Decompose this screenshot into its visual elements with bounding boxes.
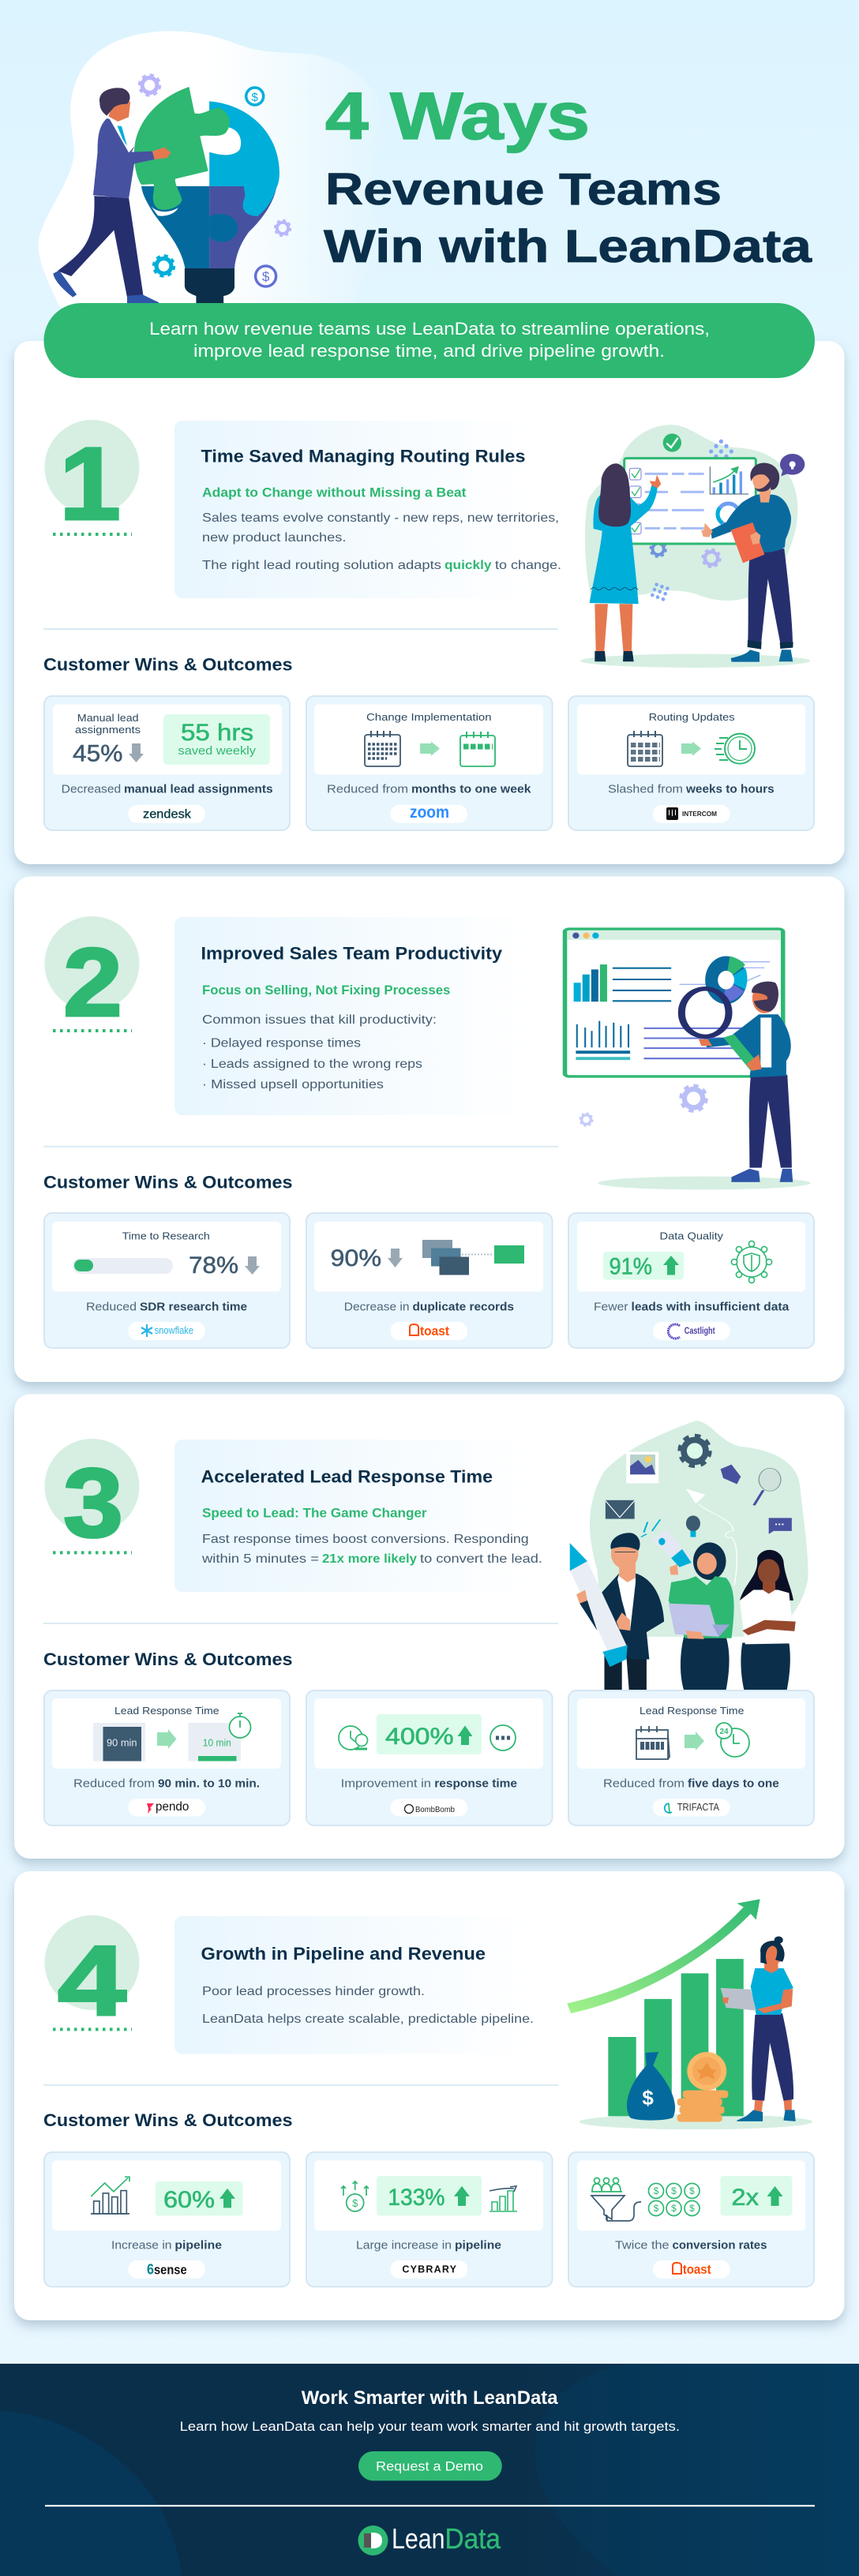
number badge 1 bbox=[44, 420, 139, 541]
card: five days to one bbox=[568, 1690, 814, 1825]
icon: arrow bbox=[420, 742, 440, 756]
logo: zoom bbox=[390, 803, 467, 823]
icon: 90 minute block bbox=[93, 1723, 145, 1762]
card: time to research: Time to Research bbox=[122, 1230, 210, 1242]
icon: purple dollar coin: $ bbox=[262, 269, 270, 284]
card: large pipeline increase: Large increase in bbox=[356, 2239, 452, 2252]
logo: pendo: pendo bbox=[156, 1800, 189, 1814]
stat: 55 hours saved: 55 hrs bbox=[181, 720, 253, 746]
title: Win with LeanData bbox=[324, 221, 812, 272]
card: duplicate records: duplicate records bbox=[412, 1301, 514, 1314]
stat: 60 percent bbox=[156, 2181, 243, 2216]
title bbox=[324, 79, 812, 272]
text panel: quickly bbox=[445, 559, 492, 572]
icon: calendar bbox=[636, 1726, 670, 1759]
icon: small gear bbox=[580, 1114, 592, 1125]
card: time to research: SDR research time bbox=[140, 1301, 247, 1314]
icon: funnel with people and coins: $ bbox=[671, 2185, 677, 2196]
icon: 90 minute block: 90 min bbox=[107, 1736, 137, 1748]
icon: cyan dollar coin: $ bbox=[252, 91, 259, 104]
logo: zendesk: zendesk bbox=[143, 807, 192, 821]
card: conversion rates bbox=[568, 2152, 814, 2287]
text panel: The right lead routing solution adapts bbox=[202, 559, 441, 572]
icon: clock with coin bbox=[339, 1726, 368, 1750]
icon: cyan gear bbox=[154, 256, 174, 276]
icon: 10 minute block: 10 min bbox=[203, 1736, 231, 1748]
number badge 3: 3 bbox=[63, 1449, 123, 1558]
panel 4: pipeline and revenue growth bbox=[14, 1871, 845, 2320]
intro banner: improve lead response time, and drive pipeline growth. bbox=[193, 341, 665, 361]
panel 3: lead response time bbox=[14, 1394, 845, 1859]
icon: gray calendar bbox=[365, 731, 400, 766]
card: pipeline increase: pipeline bbox=[174, 2239, 222, 2252]
icon: small purple gear bbox=[275, 220, 291, 236]
logo: zendesk bbox=[128, 805, 205, 823]
button: request a demo bbox=[358, 2451, 502, 2481]
card: duplicate records: Decrease in bbox=[344, 1301, 409, 1314]
icon: stopwatch bbox=[229, 1713, 251, 1738]
number badge 4: 4 bbox=[58, 1925, 126, 2036]
card: routing updates: Slashed from bbox=[608, 784, 683, 796]
card: 90 to 10 minutes bbox=[44, 1690, 290, 1825]
panel 1: time saved bbox=[14, 341, 845, 864]
icon: purple dollar coin bbox=[256, 266, 276, 286]
icon: dark gear bbox=[680, 1436, 710, 1466]
hero illustration: person fitting a puzzle piece into a light bulb bbox=[39, 31, 383, 308]
icon: 24 hour clock bbox=[716, 1723, 749, 1757]
icon: coin with up arrows: $ bbox=[352, 2197, 358, 2209]
card: large pipeline increase: pipeline bbox=[455, 2239, 501, 2252]
logo: LeanData: Data bbox=[445, 2522, 501, 2555]
footer bbox=[0, 2364, 859, 2576]
card: duplicate records: 90% bbox=[330, 1245, 381, 1271]
logo: cybrary bbox=[390, 2260, 467, 2278]
logo: toast bbox=[390, 1322, 467, 1340]
card: large pipeline increase bbox=[306, 2152, 553, 2287]
icon: purple gear bbox=[140, 75, 159, 95]
text panel: Poor lead processes hinder growth. bbox=[202, 1985, 425, 1998]
card: pipeline increase: Increase in bbox=[111, 2239, 172, 2252]
logo: zoom: zoom bbox=[410, 803, 449, 822]
logo: 6sense: sense bbox=[154, 2262, 187, 2277]
number badge 2 bbox=[44, 916, 139, 1037]
icon: green calendar bbox=[460, 732, 495, 766]
icon: funnel with people and coins: $ bbox=[654, 2203, 659, 2214]
number badge 2: 2 bbox=[63, 929, 122, 1037]
icon: bar chart with trend arrow bbox=[91, 2177, 129, 2214]
number badge 3 bbox=[44, 1439, 139, 1558]
logo: intercom bbox=[653, 805, 730, 823]
icon: funnel with people and coins bbox=[591, 2178, 700, 2221]
text panel bbox=[174, 1440, 593, 1592]
card: conversion rates: Twice the bbox=[615, 2239, 670, 2252]
title: Revenue Teams bbox=[325, 164, 722, 215]
icon: calendar bbox=[628, 731, 662, 766]
card: time to research: Reduced bbox=[86, 1301, 137, 1314]
logo: 6sense: 6 bbox=[147, 2261, 154, 2277]
text panel: within 5 minutes = bbox=[201, 1552, 319, 1566]
card: conversion rates: conversion rates bbox=[673, 2239, 767, 2252]
logo: castlight: Castlight bbox=[685, 1327, 715, 1336]
text panel: Accelerated Lead Response Time bbox=[201, 1467, 493, 1487]
card: five days to one: Reduced from bbox=[603, 1777, 685, 1790]
text panel: Time Saved Managing Routing Rules bbox=[201, 447, 526, 466]
text panel bbox=[174, 1916, 593, 2054]
card: 90 to 10 minutes: Reduced from bbox=[73, 1777, 155, 1790]
card: five days to one: five days to one bbox=[688, 1777, 779, 1790]
icon: funnel with people and coins: $ bbox=[689, 2203, 695, 2214]
card: 90 to 10 minutes: Lead Response Time bbox=[114, 1705, 219, 1717]
illustration: growth chart with woman and money: $ bbox=[642, 2086, 654, 2110]
illustration: marketing team with megaphone bbox=[570, 1421, 808, 1690]
stat: 133 percent bbox=[377, 2176, 482, 2216]
text panel: LeanData helps create scalable, predictable pipeline. bbox=[202, 2012, 534, 2026]
card: routing updates: Routing Updates bbox=[649, 711, 735, 723]
text panel: Common issues that kill productivity: bbox=[202, 1013, 437, 1027]
card: change implementation: Reduced from bbox=[327, 784, 408, 796]
card: manual lead assignments: Decreased bbox=[62, 784, 121, 796]
card: manual lead assignments: 45% bbox=[73, 740, 122, 766]
card: pipeline increase bbox=[44, 2152, 290, 2287]
card: data quality: Data Quality bbox=[660, 1230, 724, 1242]
logo: intercom: INTERCOM bbox=[682, 810, 717, 818]
text panel: 21x more likely bbox=[322, 1552, 417, 1566]
card: manual lead assignments: assignments bbox=[75, 724, 141, 736]
text panel: Focus on Selling, Not Fixing Processes bbox=[202, 983, 450, 998]
icon: large gear bbox=[681, 1086, 706, 1110]
card: data quality: leads with insufficient data bbox=[632, 1301, 790, 1314]
logo: snowflake bbox=[128, 1322, 205, 1340]
logo: toast bbox=[653, 2260, 730, 2278]
stat: 2x bbox=[720, 2176, 793, 2216]
card: change implementation bbox=[306, 696, 553, 830]
card: 400 percent: Improvement in bbox=[341, 1777, 431, 1790]
number badge 4 bbox=[44, 1915, 139, 2036]
text panel: · Delayed response times bbox=[202, 1036, 361, 1050]
icon: down arrow bbox=[388, 1249, 403, 1267]
icon: chat bubble bbox=[490, 1725, 516, 1750]
illustration: analyst with dashboard and magnifier bbox=[565, 929, 810, 1189]
heading: customer wins: Customer Wins & Outcomes bbox=[43, 1649, 292, 1669]
heading: customer wins: Customer Wins & Outcomes bbox=[43, 1173, 292, 1193]
card: 400 percent: response time bbox=[434, 1777, 517, 1790]
icon: cyan dollar coin bbox=[246, 88, 264, 105]
text panel: Adapt to Change without Missing a Beat bbox=[202, 486, 467, 500]
card: manual lead assignments: manual lead assignments bbox=[124, 784, 273, 796]
text panel: Sales teams evolve constantly - new reps, new territories, bbox=[202, 511, 559, 525]
text panel: new product launches. bbox=[202, 531, 346, 545]
logo: LeanData: Lean bbox=[392, 2522, 445, 2555]
card: 400 percent bbox=[306, 1690, 553, 1825]
card: manual lead assignments: Manual lead bbox=[77, 712, 139, 724]
logo: pendo bbox=[128, 1799, 205, 1817]
icon: coin with up arrows bbox=[341, 2181, 369, 2211]
card: data quality: Fewer bbox=[594, 1301, 628, 1314]
card: 90 to 10 minutes: 90 min. to 10 min. bbox=[158, 1777, 260, 1790]
stat: 55 hours saved: saved weekly bbox=[178, 744, 257, 758]
icon: down arrow bbox=[129, 743, 144, 762]
icon: growing bars bbox=[490, 2186, 517, 2211]
text panel: Fast response times boost conversions. Responding bbox=[202, 1533, 529, 1546]
logo: LeanData bbox=[358, 2522, 501, 2555]
logo: snowflake: snowflake bbox=[155, 1325, 193, 1336]
icon: shield network bbox=[731, 1241, 772, 1283]
logo: trifacta bbox=[653, 1799, 730, 1817]
stat: 2x: 2x bbox=[731, 2185, 759, 2211]
logo: trifacta: TRIFACTA bbox=[677, 1802, 720, 1813]
text panel: Speed to Lead: The Game Changer bbox=[202, 1507, 427, 1521]
card: change implementation: months to one week bbox=[411, 784, 532, 796]
icon: fast clock bbox=[715, 734, 755, 764]
icon: 10 minute block bbox=[188, 1723, 241, 1762]
icon: funnel with people and coins: $ bbox=[654, 2185, 659, 2196]
title: 4 Ways bbox=[325, 79, 590, 153]
footer text: Learn how LeanData can help your team work smarter and hit growth targets. bbox=[180, 2419, 680, 2434]
text panel: to change. bbox=[495, 559, 561, 572]
logo: bombbomb bbox=[390, 1799, 467, 1817]
intro banner: Learn how revenue teams use LeanData to streamline operations, bbox=[149, 319, 710, 339]
card: duplicate records bbox=[306, 1213, 553, 1348]
text panel: Improved Sales Team Productivity bbox=[201, 944, 503, 964]
icon: duplicate stacks bbox=[422, 1240, 524, 1275]
card: five days to one: Lead Response Time bbox=[640, 1705, 744, 1717]
intro banner bbox=[44, 303, 815, 378]
stat: 91 percent: 91% bbox=[610, 1253, 652, 1280]
heading: customer wins: Customer Wins & Outcomes bbox=[43, 655, 292, 675]
card: data quality bbox=[568, 1213, 814, 1348]
logo: toast: toast bbox=[420, 1324, 449, 1339]
stat: 133 percent: 133% bbox=[388, 2185, 445, 2211]
stat: 55 hours saved bbox=[163, 714, 270, 765]
footer heading: Work Smarter with LeanData bbox=[302, 2387, 558, 2409]
icon: funnel with people and coins: $ bbox=[671, 2203, 677, 2214]
logo: 6sense bbox=[128, 2260, 205, 2278]
icon: funnel with people and coins: $ bbox=[689, 2185, 695, 2196]
illustration: growth chart with woman and money bbox=[567, 1899, 812, 2129]
button: request a demo: Request a Demo bbox=[376, 2459, 483, 2474]
stat: 400 percent: 400% bbox=[385, 1724, 454, 1750]
illustration: team reviewing routing board bbox=[580, 425, 810, 668]
stat: 60 percent: 60% bbox=[163, 2187, 215, 2213]
icon: arrow bbox=[157, 1729, 177, 1749]
text panel: · Missed upsell opportunities bbox=[202, 1078, 384, 1091]
text panel: Growth in Pipeline and Revenue bbox=[201, 1944, 486, 1964]
logo: toast: toast bbox=[683, 2263, 711, 2277]
icon: down arrow bbox=[245, 1256, 260, 1275]
card: time to research: 78% bbox=[189, 1252, 238, 1279]
icon: 24 hour clock: 24 bbox=[719, 1728, 729, 1736]
text panel: to convert the lead. bbox=[420, 1552, 542, 1566]
stat: 91 percent bbox=[603, 1252, 684, 1280]
progress bar bbox=[73, 1258, 173, 1274]
stat: 400 percent bbox=[377, 1714, 482, 1754]
text panel bbox=[174, 421, 593, 598]
card: change implementation: Change Implementation bbox=[366, 711, 491, 723]
icon: arrow bbox=[685, 1732, 704, 1750]
logo: cybrary: CYBRARY bbox=[402, 2263, 457, 2275]
heading: customer wins: Customer Wins & Outcomes bbox=[43, 2110, 292, 2130]
number badge 1: 1 bbox=[59, 425, 121, 541]
card: routing updates bbox=[568, 696, 814, 830]
text panel bbox=[174, 917, 593, 1115]
logo: castlight bbox=[653, 1322, 730, 1340]
card: routing updates: weeks to hours bbox=[685, 784, 775, 796]
card: manual lead assignments bbox=[44, 696, 290, 830]
logo: bombbomb: BombBomb bbox=[415, 1805, 455, 1814]
text panel: · Leads assigned to the wrong reps bbox=[202, 1058, 422, 1071]
card: time to research bbox=[44, 1213, 290, 1348]
panel 2: sales team productivity bbox=[14, 876, 845, 1382]
icon: arrow bbox=[681, 742, 701, 756]
